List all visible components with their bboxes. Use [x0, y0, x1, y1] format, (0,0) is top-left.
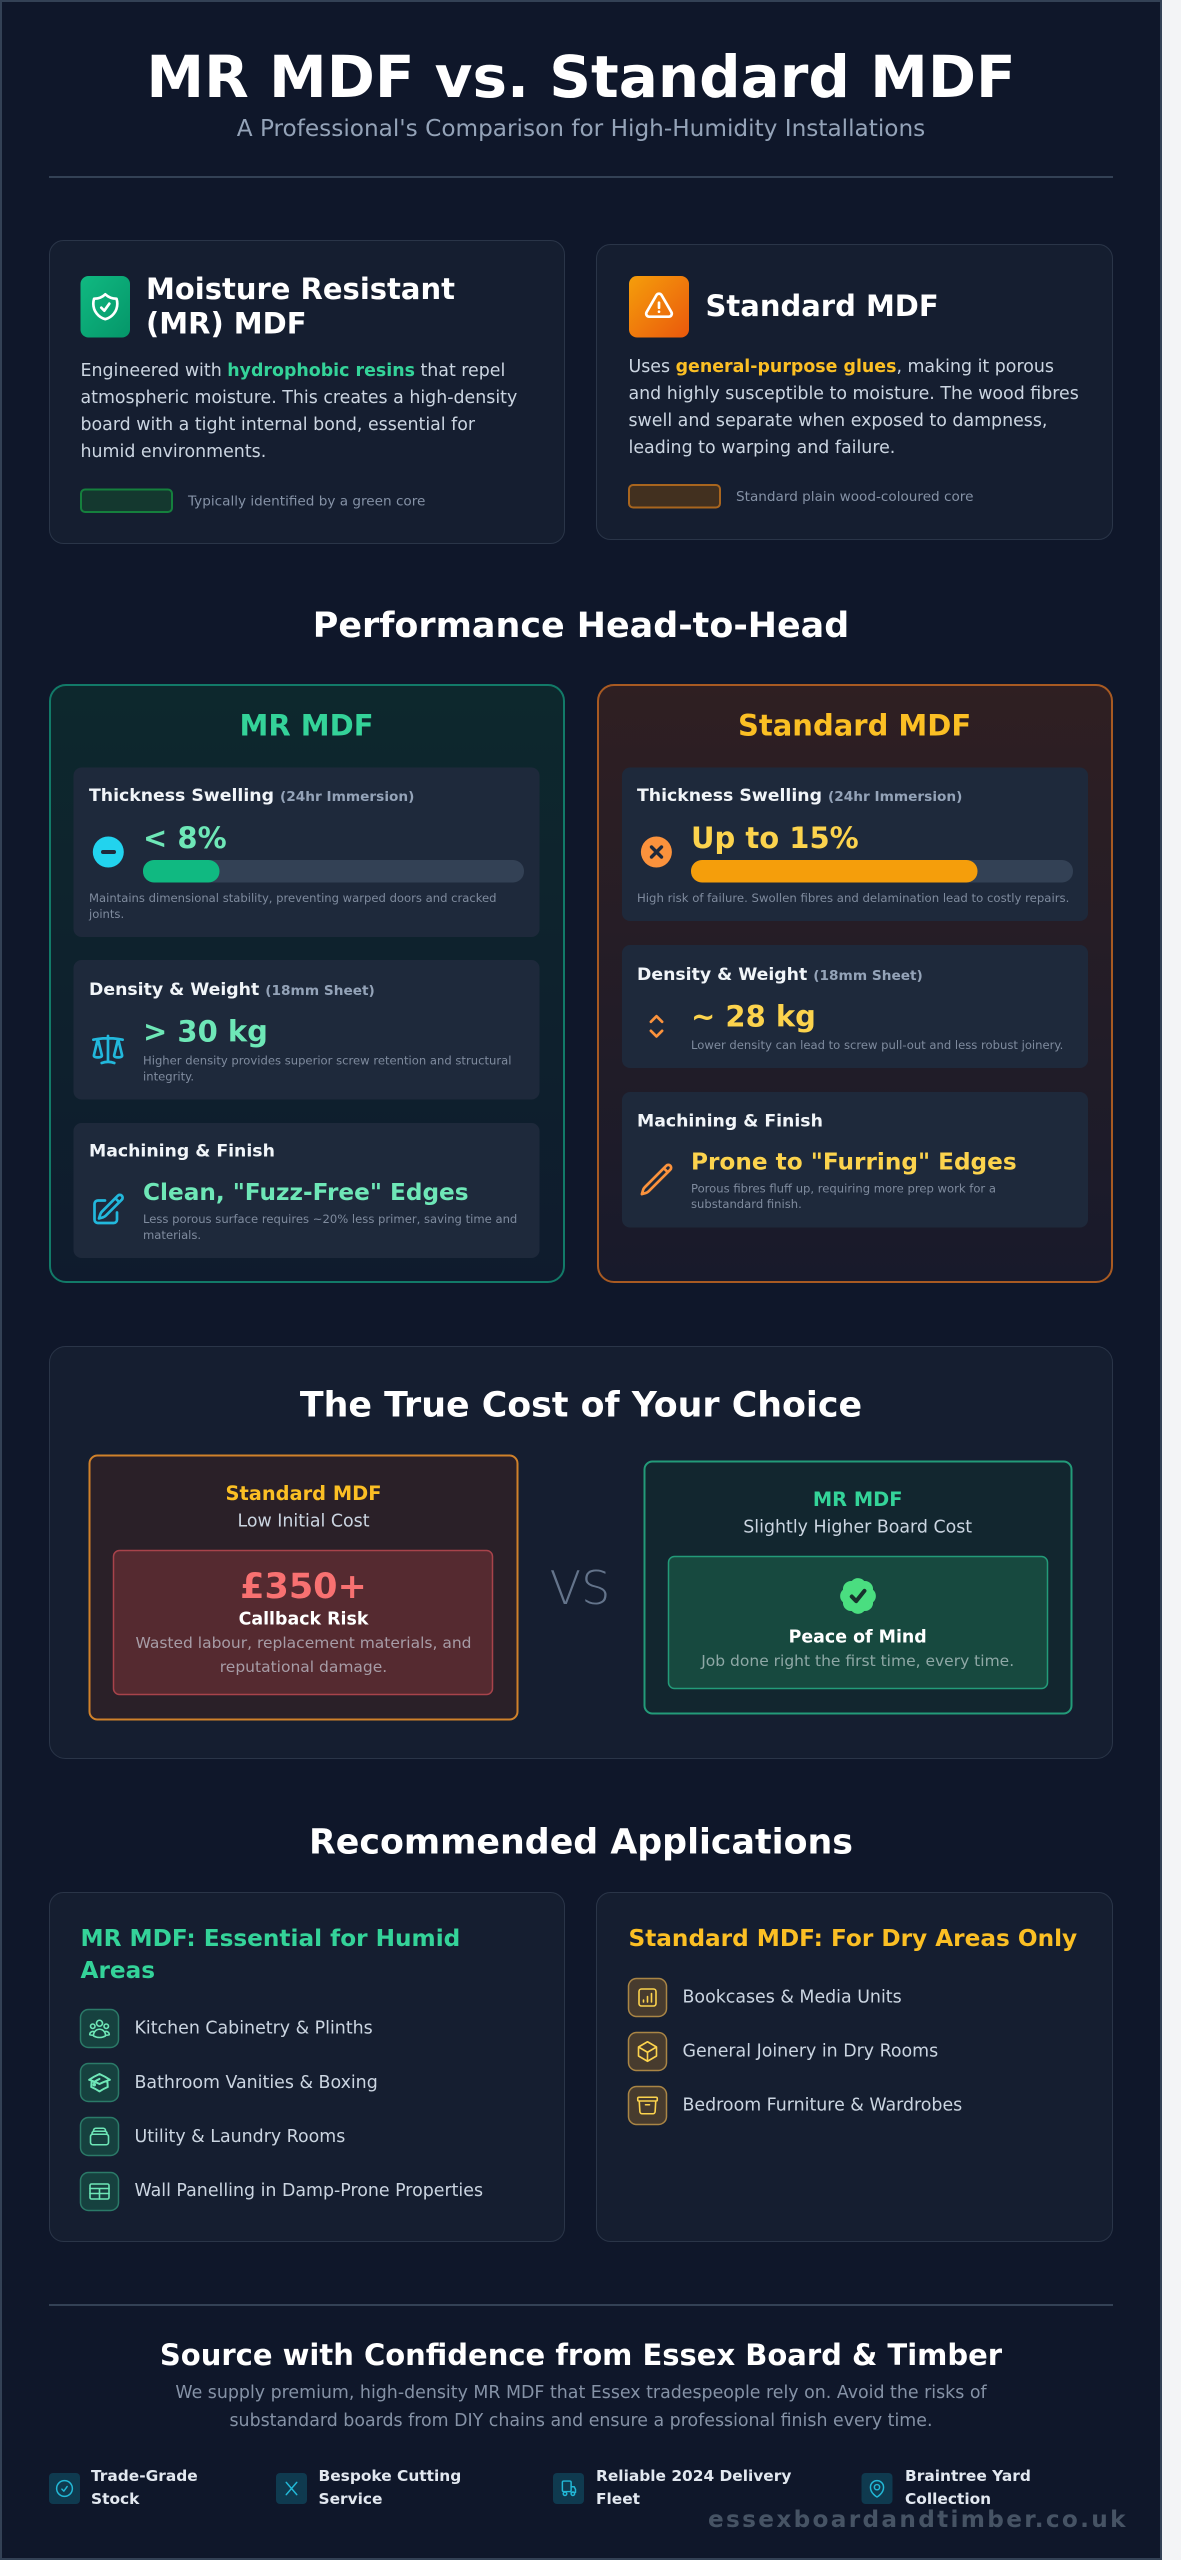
item: wall panelling: Wall Panelling in Damp-Prone Properties: [134, 2181, 483, 2201]
footer text: We supply premium, high-density MR MDF that Essex tradespeople rely on. Avoid the risks of: [175, 2383, 987, 2403]
metric: density: Density & Weight (18mm Sheet): [637, 965, 923, 985]
item: kitchen: Kitchen Cabinetry & Plinths: [134, 2018, 373, 2038]
core sample swatch: [81, 490, 172, 512]
cost card: standard: Standard MDF: [226, 1482, 381, 1505]
core label: Typically identified by a green core: [187, 494, 425, 510]
bar: 75 percent: [691, 860, 1073, 882]
item: utility: Utility & Laundry Rooms: [134, 2127, 345, 2147]
metric: thickness swelling: Thickness Swelling (24hr Immersion): [637, 786, 962, 806]
icon: pencil: [640, 1164, 672, 1196]
callback risk box: Wasted labour, replacement materials, and: [136, 1634, 471, 1652]
peace of mind box: [668, 1556, 1048, 1688]
feature: delivery fleet: Reliable 2024 Delivery: [596, 2467, 791, 2485]
metric: machining: [74, 1123, 540, 1258]
metric: thickness swelling: < 8%: [143, 821, 227, 855]
item: bathroom: Bathroom Vanities & Boxing: [134, 2073, 378, 2093]
panel: standard intro: [596, 244, 1112, 540]
feature: braintree yard: Collection: [905, 2490, 991, 2508]
metric: thickness swelling: High risk of failure. Swollen fibres and delamination lead to costly repairs.: [637, 891, 1069, 905]
heading: (MR) MDF: [146, 306, 307, 340]
heading: Standard MDF: [706, 289, 939, 323]
icon: minus circle: [93, 836, 124, 868]
core label: Standard plain wood-coloured core: [736, 489, 973, 505]
section heading: applications: Recommended Applications: [309, 1822, 853, 1862]
item: bookcases: [628, 1978, 902, 2016]
item: utility: [80, 2118, 345, 2156]
feature: delivery fleet: [553, 2467, 791, 2508]
peace of mind box: Job done right the first time, every time.: [700, 1652, 1014, 1670]
cost card: MR: Slightly Higher Board Cost: [743, 1518, 972, 1538]
panel: Standard MDF performance: [598, 685, 1112, 1282]
callback risk box: £350+: [240, 1567, 367, 1607]
heading: The True Cost of Your Choice: [300, 1386, 862, 1426]
callback risk box: Callback Risk: [239, 1610, 369, 1630]
description: board with a tight internal bond, essential for: [80, 415, 476, 435]
item: bedroom: [628, 2086, 962, 2124]
item: joinery: [628, 2032, 938, 2070]
metric: machining: Prone to "Furring" Edges: [691, 1148, 1017, 1176]
cost card: standard: [90, 1456, 518, 1720]
panel: MR MDF performance: [50, 685, 564, 1282]
panel title: MR MDF: [239, 708, 374, 742]
icon: shield check: [80, 276, 130, 338]
panel: standard applications: [596, 1892, 1112, 2242]
icon: x circle: [641, 836, 672, 868]
feature: braintree yard: Braintree Yard: [905, 2467, 1031, 2485]
metric: machining: Machining & Finish: [89, 1142, 275, 1162]
footer text: substandard boards from DIY chains and ensure a professional finish every time.: [230, 2411, 932, 2431]
subtitle: A Professional's Comparison for High-Humidity Installations: [237, 115, 925, 142]
metric: density: > 30 kg: [143, 1015, 268, 1049]
metric: thickness swelling: joints.: [88, 907, 124, 921]
cost card: MR: [644, 1462, 1072, 1714]
item: joinery: General Joinery in Dry Rooms: [682, 2042, 938, 2062]
description: swell and separate when exposed to dampness,: [628, 411, 1047, 431]
VS label: VS: [550, 1561, 610, 1615]
website watermark: essexboardandtimber.co.uk: [708, 2506, 1128, 2533]
description: Engineered with: [80, 361, 227, 381]
icon: scale: [92, 1034, 124, 1064]
bar: 20 percent: [143, 860, 524, 882]
metric: machining: Porous fibres fluff up, requiring more prep work for a: [691, 1182, 996, 1196]
item: bathroom: [80, 2064, 378, 2102]
title: MR MDF vs. Standard MDF: [146, 43, 1016, 111]
icon: check badge: [840, 1578, 876, 1614]
cost card: MR: MR MDF: [813, 1488, 903, 1511]
description: general-purpose glues, making it porous: [676, 357, 1054, 377]
description: atmospheric moisture. This creates a high-density: [80, 388, 517, 408]
panel: moisture resistant intro: [50, 240, 564, 544]
panel: MR applications: MR MDF: Essential for Humid: [80, 1925, 460, 1952]
feature: trade-grade stock: Stock: [91, 2490, 140, 2508]
metric: thickness swelling: [622, 768, 1088, 921]
item: bedroom: Bedroom Furniture & Wardrobes: [682, 2096, 962, 2116]
metric: thickness swelling: Maintains dimensional stability, preventing warped doors and cracked: [89, 891, 497, 905]
icon: pencil square: [93, 1194, 124, 1224]
feature: braintree yard: [862, 2467, 1031, 2508]
metric: density: ~ 28 kg: [691, 1000, 816, 1034]
item: bookcases: Bookcases & Media Units: [682, 1988, 902, 2008]
description: and highly susceptible to moisture. The wood fibres: [628, 384, 1079, 404]
metric: machining: Machining & Finish: [637, 1112, 823, 1132]
description: Uses: [628, 357, 676, 377]
metric: thickness swelling: [74, 768, 540, 937]
callback risk box: reputational damage.: [220, 1658, 387, 1676]
metric: density: [622, 945, 1088, 1068]
peace of mind box: Peace of Mind: [789, 1627, 927, 1647]
metric: machining: [622, 1092, 1088, 1228]
footer heading: Source with Confidence from Essex Board & Timber: [160, 2338, 1003, 2372]
item: kitchen: [80, 2010, 373, 2048]
panel: MR applications: [50, 1892, 564, 2242]
metric: density: integrity.: [143, 1070, 194, 1084]
section heading: performance: Performance Head-to-Head: [313, 606, 849, 646]
metric: density: Lower density can lead to screw pull-out and less robust joinery.: [691, 1038, 1063, 1052]
metric: machining: materials.: [143, 1228, 201, 1242]
icon: chevrons up down: [649, 1014, 664, 1038]
heading: Moisture Resistant: [146, 272, 455, 306]
metric: machining: Clean, "Fuzz-Free" Edges: [143, 1179, 469, 1206]
metric: density: Higher density provides superior screw retention and structural: [143, 1054, 511, 1068]
description: hydrophobic resins that repel: [227, 361, 505, 381]
description: humid environments.: [80, 442, 266, 462]
metric: thickness swelling: Up to 15%: [691, 821, 859, 855]
cost card: standard: Low Initial Cost: [237, 1512, 370, 1532]
metric: machining: substandard finish.: [691, 1197, 802, 1211]
metric: thickness swelling: Thickness Swelling (24hr Immersion): [89, 786, 414, 806]
feature: bespoke cutting: [276, 2467, 461, 2508]
metric: density: [74, 960, 540, 1100]
feature: bespoke cutting: Service: [318, 2490, 382, 2508]
panel: true cost: [50, 1346, 1112, 1758]
feature: trade-grade stock: Trade-Grade: [91, 2467, 198, 2485]
description: leading to warping and failure.: [628, 438, 895, 458]
icon: warning triangle: [629, 276, 689, 338]
panel: standard applications: Standard MDF: For Dry Areas Only: [628, 1925, 1077, 1952]
metric: machining: Less porous surface requires ~20% less primer, saving time and: [143, 1212, 517, 1226]
feature: trade-grade stock: [49, 2467, 198, 2508]
feature: bespoke cutting: Bespoke Cutting: [318, 2467, 461, 2485]
feature: delivery fleet: Fleet: [596, 2490, 640, 2508]
callback risk box: [114, 1550, 492, 1694]
core sample swatch: [629, 485, 720, 508]
item: wall panelling: [80, 2172, 483, 2210]
panel: MR applications: Areas: [80, 1957, 155, 1984]
panel title: Standard MDF: [738, 708, 971, 742]
metric: density: Density & Weight (18mm Sheet): [89, 980, 375, 1000]
